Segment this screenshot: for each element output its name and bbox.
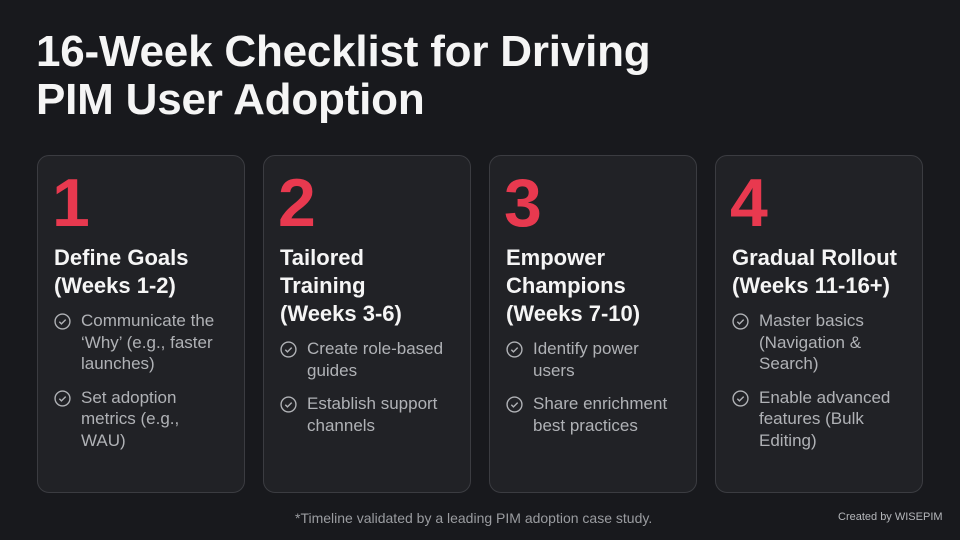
number 1: 1: [52, 165, 90, 241]
bullet: features (Bulk: [759, 409, 864, 428]
bullet: [506, 394, 668, 434]
panel: step 3: [489, 155, 697, 493]
heading 4: [732, 245, 897, 298]
bullet: WAU): [81, 430, 126, 450]
credit: Created by WISEPIM: [838, 511, 943, 523]
heading 3: [506, 245, 640, 326]
bullet: Identify power: [533, 339, 639, 358]
number 2: 2: [278, 165, 316, 241]
heading 2: Tailored: [280, 245, 364, 270]
bullet: Create role-based: [307, 339, 443, 358]
heading 4: Gradual Rollout: [732, 245, 897, 270]
bullet: Enable advanced: [759, 388, 890, 406]
bullet: [732, 388, 890, 450]
bullet: Set adoption: [81, 388, 176, 406]
bullet: [506, 339, 639, 380]
heading 3: (Weeks 7-10): [506, 301, 640, 326]
title: 16-Week Checklist for Driving: [36, 27, 650, 76]
footnote: *Timeline validated by a leading PIM adoption case study.: [295, 510, 652, 526]
heading 3: Empower: [506, 245, 605, 270]
bullet: (Navigation &: [759, 332, 861, 352]
bullet: guides: [307, 360, 357, 380]
heading 1: Define Goals: [54, 245, 188, 270]
heading 3: Champions: [506, 273, 626, 298]
heading 2: (Weeks 3-6): [280, 301, 402, 326]
bullet: Communicate the ‘Why’ (e.g., faster launches): [81, 311, 214, 373]
number 3: 3: [504, 165, 542, 241]
heading 2: [280, 245, 402, 326]
number 4: 4: [730, 165, 768, 241]
bullet: Master basics: [759, 311, 864, 330]
panel: step 1: [37, 155, 245, 493]
heading 4: (Weeks 11-16+): [732, 273, 890, 298]
title: [36, 27, 650, 124]
bullet: metrics (e.g.,: [81, 409, 179, 428]
bullet: [280, 394, 438, 434]
bullet: [732, 311, 864, 373]
heading 1: [54, 245, 188, 298]
bullet: [54, 388, 179, 450]
title: PIM User Adoption: [36, 75, 425, 124]
panel: step 2: [263, 155, 471, 493]
panel: step 4: [715, 155, 923, 493]
bullet: best practices: [533, 416, 638, 434]
bullet: Establish support: [307, 394, 437, 413]
bullet: channels: [307, 416, 375, 434]
bullet: Share enrichment: [533, 394, 667, 413]
bullet: Search): [759, 354, 819, 373]
bullet: users: [533, 360, 575, 380]
heading 1: (Weeks 1-2): [54, 273, 176, 298]
bullet: [280, 339, 443, 380]
bullet: Editing): [759, 430, 817, 450]
heading 2: Training: [280, 273, 366, 298]
